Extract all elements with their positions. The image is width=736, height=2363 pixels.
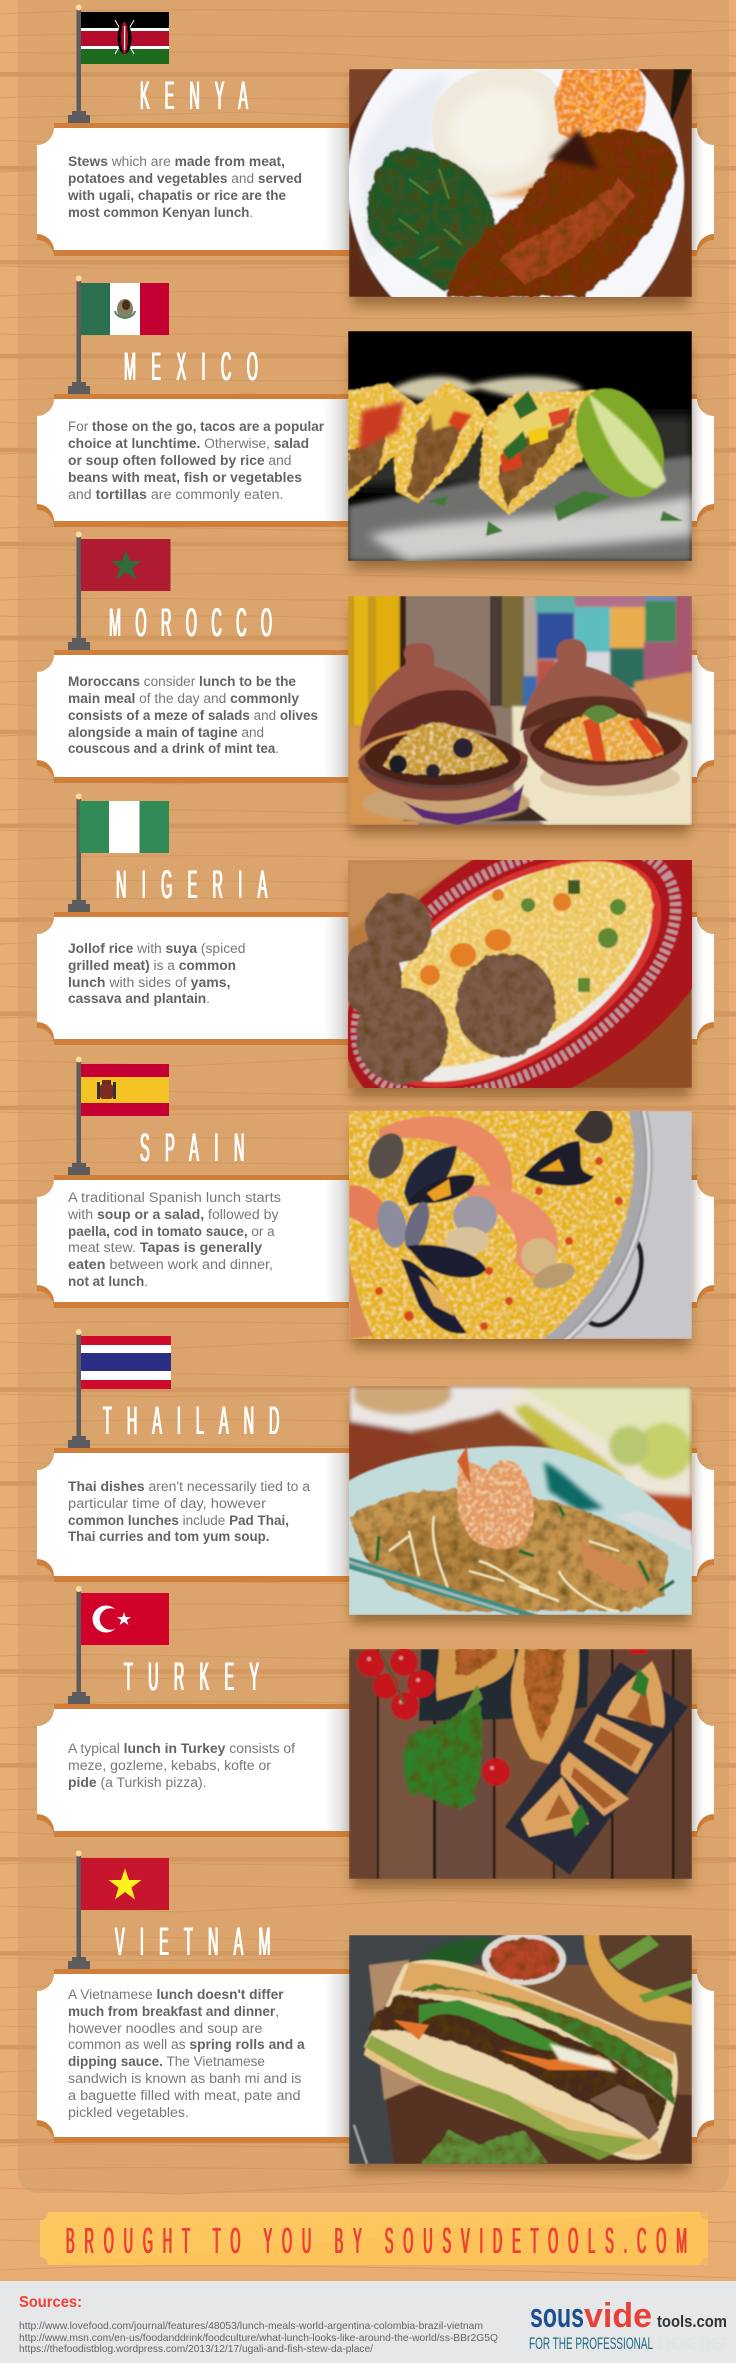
banner text: BROUGHT TO YOU BY SOUSVIDETOOLS.COM (66, 2221, 687, 2261)
heading: Mexico: MEXICO (124, 345, 258, 389)
body text: Kenya (67, 154, 302, 220)
body text: Vietnam: dipping sauce. The Vietnamese (68, 2054, 265, 2069)
photo shadow (351, 873, 690, 1097)
body text: Nigeria: Jollof rice with suya (spiced (68, 941, 246, 956)
logo: sousvide tools: vide (584, 2297, 652, 2335)
body text: Kenya: potatoes and vegetables and served (68, 171, 302, 186)
heading: Vietnam: VIETNAM (115, 1920, 271, 1964)
flag: Nigeria (68, 794, 169, 912)
body text: Vietnam (68, 1987, 305, 2120)
flag: Thailand (68, 1329, 171, 1448)
body text: Vietnam: much from breakfast and dinner, (68, 2004, 279, 2019)
body text: Thailand: Thai dishes aren't necessarily tied to a (68, 1479, 310, 1494)
body text: Kenya: most common Kenyan lunch. (68, 205, 253, 220)
section: Thailand (37, 1329, 714, 1624)
body text: Spain: with soup or a salad, followed by (67, 1207, 279, 1222)
photo shadow (352, 1399, 690, 1624)
flag: Turkey (68, 1586, 169, 1704)
body text: Vietnam: pickled vegetables. (68, 2105, 189, 2120)
text panel: Nigeria (37, 912, 714, 1045)
flag: Vietnam (68, 1850, 169, 1969)
flag: Spain (68, 1056, 169, 1175)
section: Turkey (37, 1586, 714, 1888)
body text: Turkey: pide (a Turkish pizza). (68, 1775, 206, 1790)
body text: Vietnam: common as well as spring rolls and a (68, 2037, 305, 2052)
logo: sousvide tools: tools.com (657, 2312, 727, 2331)
body text: Vietnam: a baguette filled with meat, pate and (68, 2088, 300, 2103)
heading: Morocco: MOROCCO (109, 601, 272, 645)
body text: Thailand: Thai curries and tom yum soup. (68, 1529, 270, 1544)
body text: Mexico: choice at lunchtime. Otherwise, salad (68, 436, 309, 451)
source links: https://thefoodistblog.wordpress.com/2013/12/17/ugali-and-fish-stew-da-place/ (19, 2343, 373, 2355)
heading: Kenya: KENYA (140, 74, 248, 118)
body text: Thailand (68, 1479, 310, 1544)
flag: Mexico (68, 276, 169, 394)
photo shadow (352, 1948, 690, 2173)
heading: Spain: SPAIN (140, 1126, 244, 1170)
body text: Kenya: Stews which are made from meat, (68, 154, 285, 169)
body text: Morocco: main meal of the day and commonly (68, 691, 299, 706)
logo: sousvide tools (529, 2297, 727, 2353)
section: Morocco (37, 532, 714, 834)
body text: Mexico: and tortillas are commonly eaten. (68, 487, 284, 502)
body text: Spain: meat stew. Tapas is generally (68, 1240, 263, 1255)
photo: ugali, greens and fish stew (349, 69, 692, 297)
body text: Morocco (68, 674, 318, 756)
body text: Nigeria: lunch with sides of yams, (68, 975, 230, 990)
text panel: Mexico (37, 394, 714, 527)
body text: Mexico: or soup often followed by rice and (68, 453, 292, 468)
heading: Nigeria: NIGERIA (116, 863, 267, 907)
body text: Thailand: common lunches include Pad Thai, (68, 1513, 289, 1528)
body text: Turkey: A typical lunch in Turkey consists of (68, 1741, 295, 1756)
footer (0, 2281, 736, 2363)
section: Kenya (37, 4, 714, 352)
photo: tacos and lime (348, 331, 692, 561)
section: Mexico (37, 276, 714, 570)
body text: Morocco: Moroccans consider lunch to be the (68, 674, 296, 689)
text panel: Spain (37, 1175, 714, 1308)
banner: brought to you by (40, 2212, 708, 2265)
body text: Nigeria: grilled meat) is a common (68, 958, 236, 973)
body text: Mexico: beans with meat, fish or vegetables (68, 470, 302, 485)
body text: Spain: eaten between work and dinner, (68, 1257, 273, 1272)
body text: Turkey (68, 1741, 295, 1790)
source links: http://www.lovefood.com/journal/features/48053/lunch-meals-world-argentina-colombia-brazil-vietnam (19, 2320, 483, 2332)
body text: Spain: A traditional Spanish lunch starts (68, 1190, 281, 1205)
photo: pad thai with shrimp (349, 1386, 692, 1615)
photo: pide on slate (349, 1649, 692, 1879)
source links: http://www.msn.com/en-us/foodanddrink/foodculture/what-lunch-looks-like-around-the-world/ss-BBr2G5Q (19, 2332, 498, 2344)
photo: tagines (348, 596, 692, 825)
text panel: Kenya (37, 123, 714, 256)
flag: Morocco (68, 532, 170, 650)
logo: sousvide tools: FOR THE PROFESSIONAL (529, 2335, 653, 2353)
section: Spain (37, 920, 714, 1400)
body text: Spain: paella, cod in tomato sauce, or a (68, 1224, 275, 1239)
photo shadow (352, 82, 690, 306)
body text: Morocco: alongside a main of tagine and (68, 725, 264, 740)
body text: Thailand: particular time of day, however (68, 1496, 267, 1511)
body text: Turkey: meze, gozleme, kebabs, kofte or (68, 1758, 272, 1773)
body text: Vietnam: however noodles and soup are (68, 2021, 262, 2036)
body text: Morocco: couscous and a drink of mint tea. (68, 741, 279, 756)
body text: Kenya: with ugali, chapatis or rice are the (67, 188, 286, 203)
photo: paella pan (349, 1111, 692, 1339)
photo shadow (352, 1662, 690, 1888)
section: Vietnam (37, 1850, 714, 2173)
body text: Vietnam: sandwich is known as banh mi and is (68, 2071, 302, 2086)
section: Nigeria (37, 748, 736, 1184)
source links (19, 2320, 498, 2355)
body text: Nigeria: cassava and plantain. (68, 991, 210, 1006)
body text: Mexico (68, 419, 325, 502)
body text: Spain: not at lunch. (68, 1274, 148, 1289)
text panel: Turkey (37, 1704, 714, 1837)
text panel: Thailand (37, 1448, 714, 1582)
photo: banh mi sandwich (349, 1935, 692, 2164)
photo shadow (352, 1124, 690, 1348)
text panel: Vietnam (37, 1969, 714, 2143)
sources heading: Sources: (19, 2294, 82, 2311)
photo shadow (351, 609, 690, 834)
flag: Kenya (68, 4, 169, 123)
body text: Mexico: For those on the go, tacos are a popular (68, 419, 325, 434)
logo: sousvide tools: sous (530, 2297, 584, 2335)
text panel: Morocco (37, 650, 714, 783)
photo shadow (351, 344, 690, 570)
body text: Nigeria (68, 941, 246, 1006)
body text: Spain (67, 1190, 281, 1289)
body text: Morocco: consists of a meze of salads and olives (68, 708, 318, 723)
heading: Turkey: TURKEY (124, 1655, 259, 1699)
body text: Vietnam: A Vietnamese lunch doesn't differ (68, 1987, 284, 2002)
heading: Thailand: THAILAND (103, 1399, 279, 1443)
photo: jollof rice and suya (348, 860, 692, 1088)
